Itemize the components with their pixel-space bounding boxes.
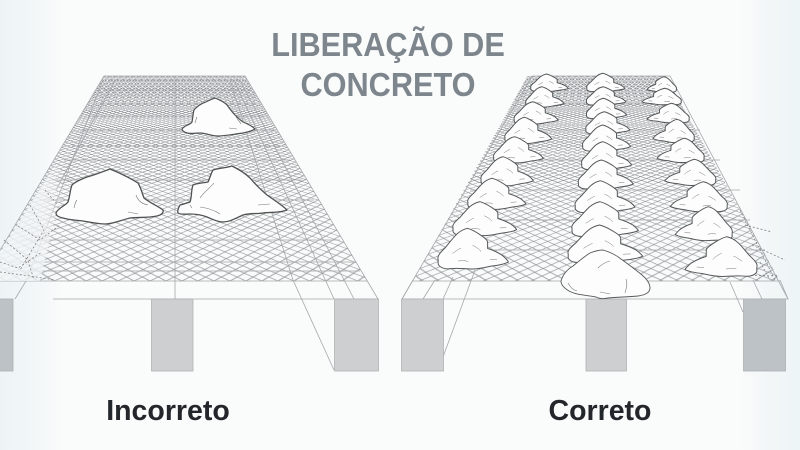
concrete pile: back: [182, 98, 255, 136]
panel: correct concrete placement: [401, 72, 788, 372]
column: left: [402, 299, 444, 371]
slab and mesh outline: [0, 76, 378, 370]
wire mesh: incorrect panel: [0, 76, 365, 281]
column: right: [744, 299, 786, 371]
title: CONCRETO: [300, 66, 476, 103]
title: [271, 26, 505, 103]
column: centre: [586, 299, 626, 371]
label: correto: Correto: [549, 395, 651, 427]
label: incorreto: Incorreto: [106, 395, 230, 427]
title: LIBERAÇÃO DE: [271, 26, 505, 63]
slab and mesh outline: [402, 76, 788, 357]
concrete pile: front centre: [561, 250, 650, 299]
pile row: right: [642, 77, 757, 276]
column: centre: [152, 299, 193, 371]
column: left: [0, 299, 13, 371]
pile row: left: [438, 74, 568, 269]
concrete pile: front left: [56, 169, 163, 224]
wire mesh: correct panel: [416, 76, 778, 281]
background tint: right: [740, 0, 800, 450]
concrete pile: front right: [178, 166, 287, 222]
mesh fading and cracked edge: [0, 165, 65, 281]
column: right: [334, 299, 378, 371]
pile row: centre: [561, 73, 650, 299]
cracked edge: [735, 210, 785, 280]
panel: incorrect concrete placement: [0, 76, 379, 372]
background tint: left: [0, 0, 62, 450]
